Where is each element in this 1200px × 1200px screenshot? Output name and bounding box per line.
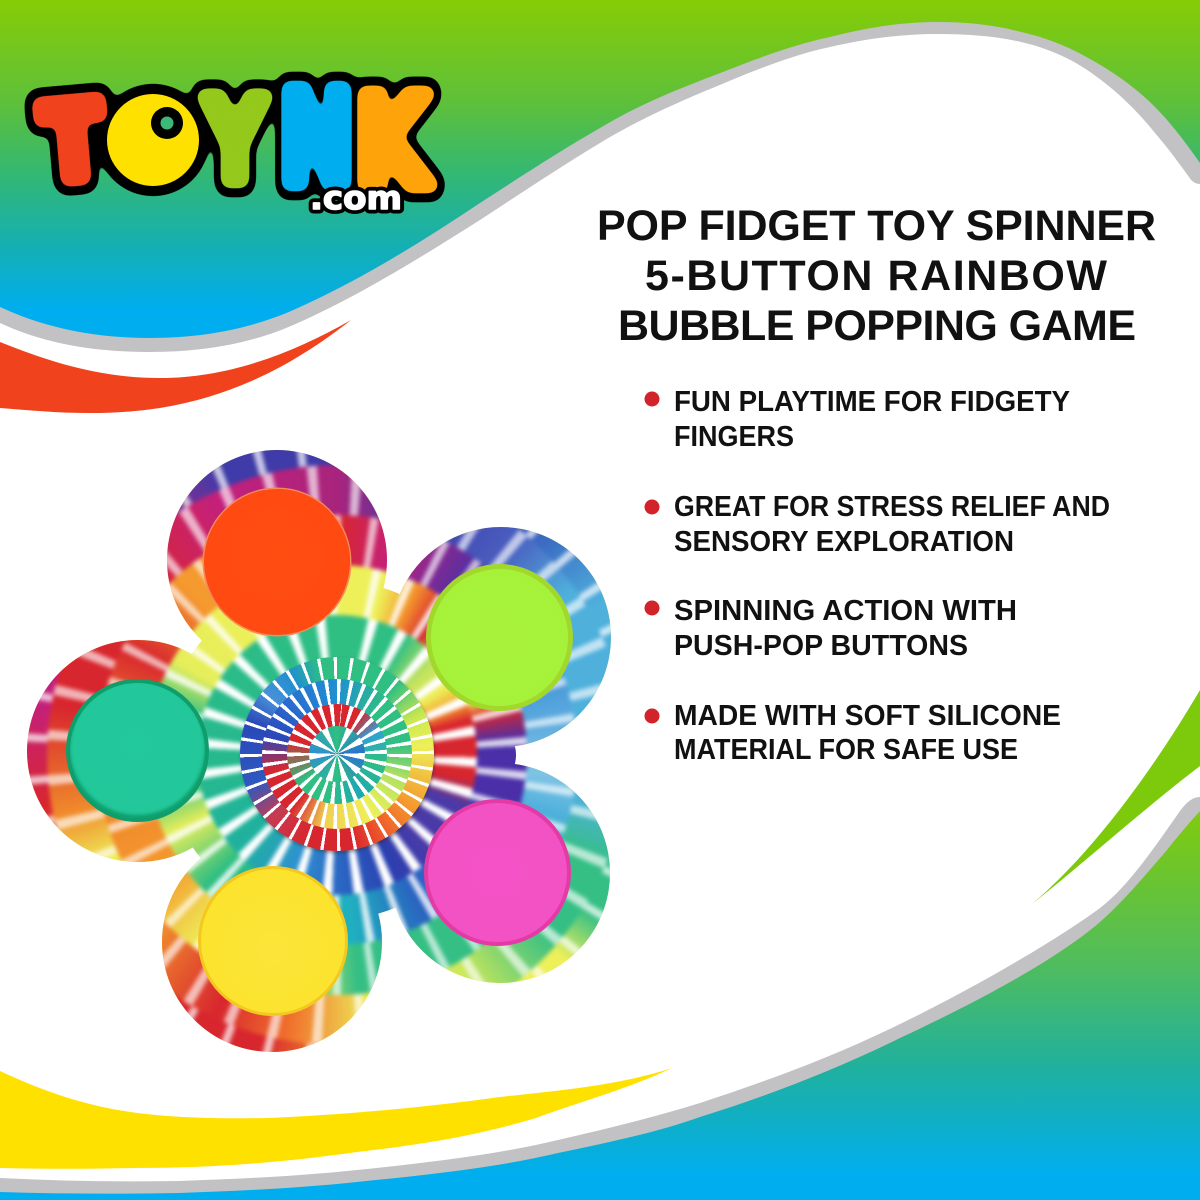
- logo .com: .com: [310, 179, 402, 217]
- bullet 2: [644, 491, 1110, 558]
- bullet 4: MATERIAL FOR SAFE USE: [674, 734, 1018, 766]
- yellow accent swoosh: [0, 1068, 672, 1169]
- logo letter K: K: [355, 70, 432, 215]
- bullet 3: PUSH-POP BUTTONS: [674, 630, 968, 662]
- title: POP FIDGET TOY SPINNER: [597, 202, 1156, 250]
- product: pop fidget spinner: [27, 450, 611, 1052]
- logo letter N: N: [279, 64, 354, 214]
- center tie-dye disc: [240, 657, 434, 851]
- title: BUBBLE POPPING GAME: [618, 302, 1136, 350]
- red accent swoosh: [0, 320, 351, 413]
- logo black outline: N: [279, 64, 354, 214]
- disc ring 2: [262, 679, 412, 829]
- button: orange: [204, 489, 350, 635]
- bullet 3: SPINNING ACTION WITH: [674, 595, 1017, 627]
- logo .com: .com: [310, 179, 402, 217]
- button: magenta: [424, 799, 571, 946]
- top swoosh grey band: [0, 0, 1200, 352]
- bullet 1: FUN PLAYTIME FOR FIDGETY: [674, 386, 1070, 418]
- bullet 2: GREAT FOR STRESS RELIEF AND: [674, 491, 1110, 523]
- logo black outline: [37, 64, 432, 215]
- button: lime: [426, 564, 573, 711]
- title: 5-BUTTON RAINBOW: [645, 252, 1107, 300]
- bottom swoosh grey band: [0, 797, 1200, 1200]
- logo letter Y: Y: [202, 74, 267, 207]
- tie-dye body: [20, 440, 620, 1060]
- logo: Toynk.com: [24, 64, 445, 217]
- disc ring 3: [287, 704, 387, 804]
- logo letter O: O: [115, 90, 191, 195]
- bullet 2: SENSORY EXPLORATION: [674, 526, 1014, 558]
- bullet 4: MADE WITH SOFT SILICONE: [674, 700, 1061, 732]
- title: [597, 202, 1156, 350]
- green accent swoosh: [1032, 690, 1200, 904]
- bullet 1: [644, 386, 1070, 453]
- logo black outline: T: [37, 79, 108, 205]
- logo black outline: Y: [202, 74, 267, 207]
- button: teal: [66, 679, 209, 822]
- disc core: [309, 726, 365, 782]
- bullet 4: [644, 700, 1061, 766]
- bottom swoosh green to blue: [0, 811, 1200, 1200]
- bullet 1: FINGERS: [674, 421, 794, 453]
- button: yellow: [198, 866, 348, 1016]
- logo letter T: T: [37, 79, 108, 205]
- bullet 3: [644, 595, 1017, 662]
- top swoosh green to blue: [0, 0, 1200, 338]
- logo black outline: K: [355, 70, 432, 215]
